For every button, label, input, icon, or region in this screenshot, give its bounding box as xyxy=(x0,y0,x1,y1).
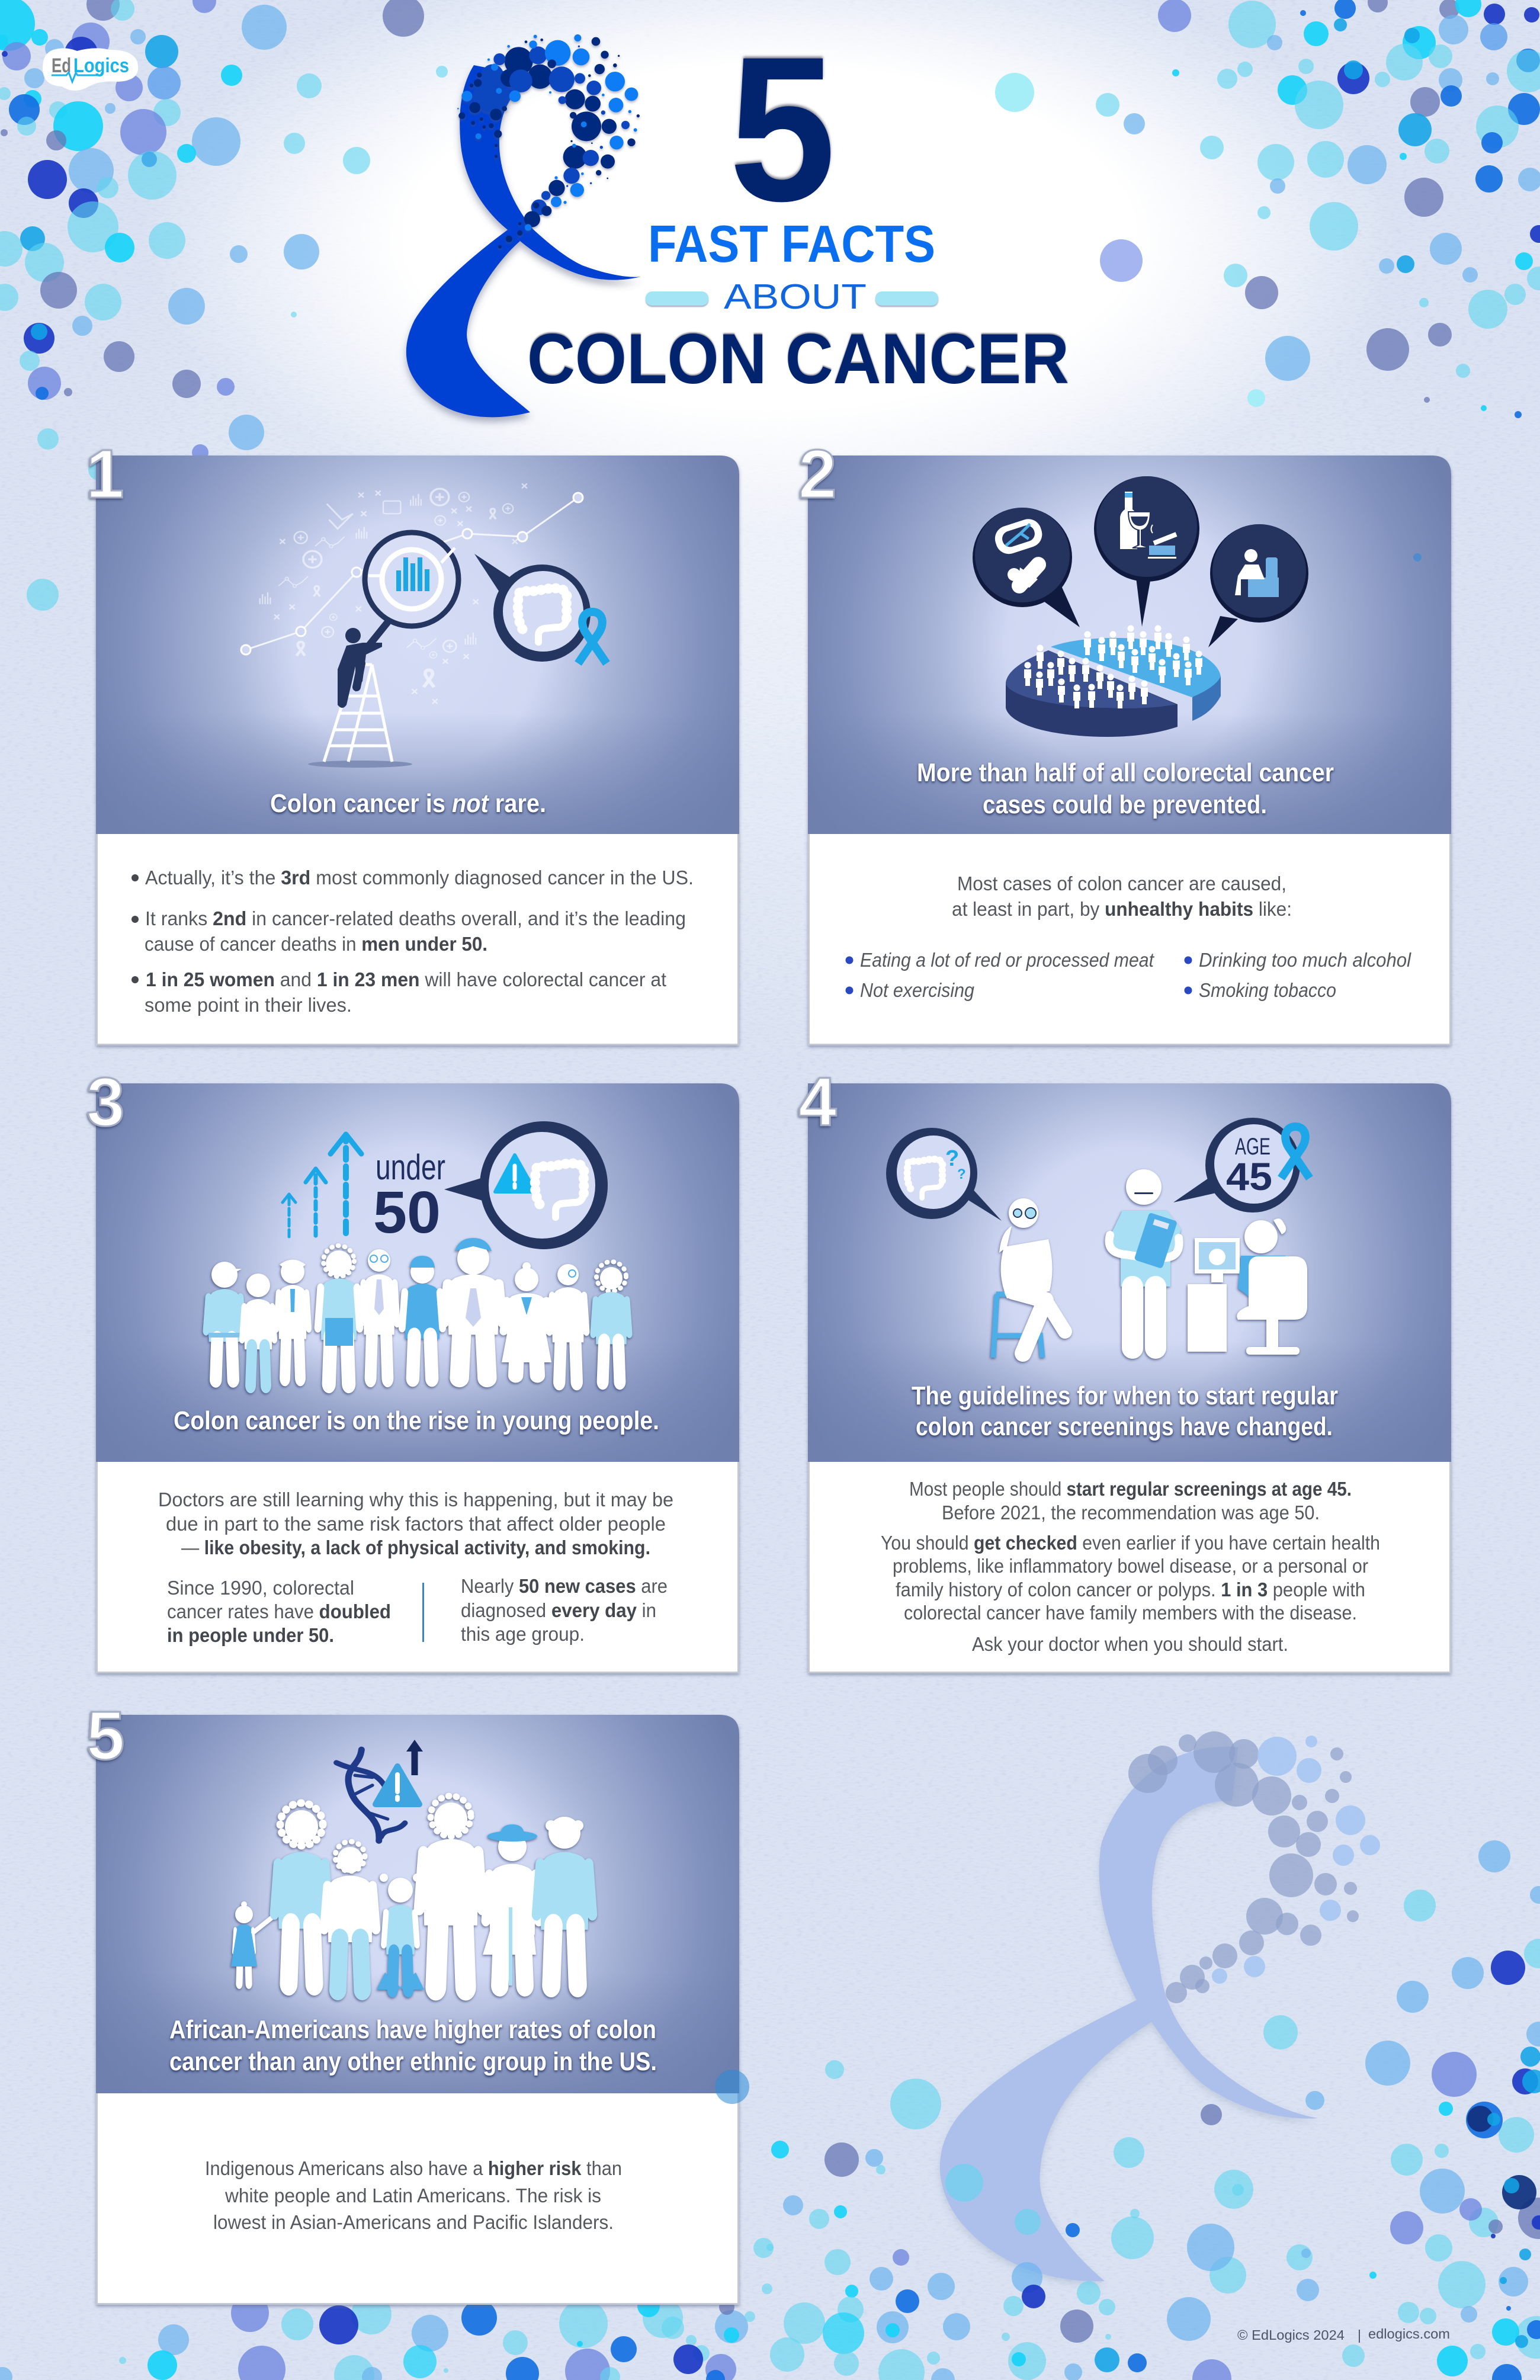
speech bubble: age 45 xyxy=(1173,1118,1310,1213)
panel 4 heading xyxy=(912,1381,1338,1441)
rising arrows xyxy=(283,1134,361,1237)
person on ladder xyxy=(338,628,382,708)
panel 4 heading: colon cancer screenings have changed. xyxy=(916,1412,1333,1441)
panel 1 bullets: Actually, it’s the 3rd most commonly diagnosed cancer in the US. xyxy=(145,867,694,889)
title: 5: 5 xyxy=(729,14,836,244)
panel 5 heading: African-Americans have higher rates of colon xyxy=(169,2015,656,2044)
title pill right xyxy=(875,291,938,306)
speech bubble: warning and colon xyxy=(444,1121,608,1249)
label: under 50: 50 xyxy=(373,1179,441,1246)
bubbles: bottom band xyxy=(0,2060,1319,2380)
overlapping dot on panel 2 xyxy=(1413,553,1422,562)
panel 1 background xyxy=(96,456,739,1045)
speech bubble: colon xyxy=(474,554,607,663)
title: COLON CANCER: COLON CANCER xyxy=(527,319,1069,399)
panel 4 heading: The guidelines for when to start regular xyxy=(912,1381,1338,1410)
panel 2 habits list: Smoking tobacco xyxy=(1199,979,1336,1001)
bubble: not exercising xyxy=(1208,524,1308,647)
panel 5 body xyxy=(205,2157,622,2233)
label: under 50: under xyxy=(376,1147,445,1187)
bubble: red meat xyxy=(973,508,1080,627)
icon: awareness ribbon xyxy=(578,612,607,663)
panel 3 heading: Colon cancer is on the rise in young people. xyxy=(174,1406,659,1435)
stat: doubled: in people under 50. xyxy=(167,1624,334,1646)
panel 4 background xyxy=(808,1083,1451,1673)
panel 3 body: — like obesity, a lack of physical activity, and smoking. xyxy=(181,1537,650,1558)
panel 1 bullets: cause of cancer deaths in men under 50. xyxy=(145,933,487,955)
panel 2 body: at least in part, by unhealthy habits like: xyxy=(952,898,1292,920)
number 2: 2 xyxy=(798,435,837,512)
panel 1: not rare xyxy=(86,435,739,1045)
faded ribbon bubbles xyxy=(1128,1731,1380,2003)
panel 2 habits list xyxy=(846,949,1412,1001)
speech bubble: colon question: ? xyxy=(957,1166,966,1182)
icon: awareness ribbon xyxy=(1281,1127,1310,1178)
panel 4 body: Most people should start regular screenings at age 45. xyxy=(909,1478,1352,1500)
logo: EdLogics: Logics xyxy=(73,54,129,77)
panel 4 body: family history of colon cancer or polyps. 1 in 3 people with xyxy=(896,1579,1365,1600)
stat: new cases xyxy=(461,1575,668,1645)
panel 2: preventable xyxy=(798,435,1451,1045)
speech bubble: age 45: 45 xyxy=(1226,1154,1272,1198)
panel 2 habits list: Not exercising xyxy=(860,979,975,1001)
number 4: 4 xyxy=(798,1063,837,1140)
speech bubble: age 45: AGE xyxy=(1235,1134,1270,1160)
warning triangle and arrow xyxy=(376,1740,423,1804)
panel 2 habits list: Drinking too much alcohol xyxy=(1199,949,1412,971)
pie chart of people xyxy=(1006,626,1221,737)
panel 5 background xyxy=(96,1715,739,2305)
panel 4 body xyxy=(881,1478,1380,1655)
bubbles: top right xyxy=(436,0,1540,418)
panel 2 heading xyxy=(917,758,1334,819)
bubbles: top left xyxy=(0,0,424,611)
panel 2 body: Most cases of colon cancer are caused, xyxy=(957,873,1286,894)
number 5: 5 xyxy=(86,1697,125,1774)
panel 3 body: Doctors are still learning why this is happening, but it may be xyxy=(158,1489,673,1510)
bubble: alcohol and tobacco xyxy=(1094,476,1199,627)
speech bubble: colon question: ? xyxy=(945,1146,959,1171)
panel 1 bullets: 1 in 25 women and 1 in 23 men will have colorectal cancer at xyxy=(146,968,666,990)
bubbles: bottom right xyxy=(1201,1840,1540,2380)
footer credit xyxy=(1237,2326,1450,2343)
doctor xyxy=(1108,1169,1181,1348)
panel 5: ethnic disparities xyxy=(86,1697,739,2305)
panel 5 body: white people and Latin Americans. The risk is xyxy=(224,2185,601,2206)
stat: new cases: Nearly 50 new cases are xyxy=(461,1575,668,1597)
stat: doubled: Since 1990, colorectal xyxy=(167,1577,354,1599)
title ribbon bubbles xyxy=(457,34,640,249)
soft central glow xyxy=(59,0,1481,1066)
stat: doubled xyxy=(167,1577,391,1646)
panel 3: rising in young people xyxy=(86,1063,739,1673)
panel 4 body: You should get checked even earlier if you have certain health xyxy=(881,1532,1380,1554)
footer credit: edlogics.com xyxy=(1368,2326,1450,2341)
group of young people xyxy=(206,1238,629,1385)
faint medical icons xyxy=(260,484,527,703)
panel 2 heading: cases could be prevented. xyxy=(983,790,1267,819)
title: ABOUT: ABOUT xyxy=(724,277,867,316)
footer credit: © EdLogics 2024 xyxy=(1237,2327,1345,2343)
family group xyxy=(231,1796,592,1990)
panel 3 background xyxy=(96,1083,739,1673)
footer credit: | xyxy=(1358,2327,1361,2343)
panel 4 body: colorectal cancer have family members with the disease. xyxy=(904,1602,1357,1624)
speech bubble: colon question xyxy=(886,1128,1002,1221)
panel 5 body: lowest in Asian-Americans and Pacific Islanders. xyxy=(213,2211,614,2233)
panel 5 heading: cancer than any other ethnic group in the US. xyxy=(169,2047,657,2076)
line chart xyxy=(241,493,583,655)
panel 1 bullets xyxy=(131,867,694,1016)
DNA helix xyxy=(336,1750,405,1841)
panel 1 heading: Colon cancer is not rare. xyxy=(270,789,546,818)
faded background ribbon xyxy=(940,1747,1318,2281)
label: under 50 xyxy=(373,1147,445,1246)
panel 5 body: Indigenous Americans also have a higher risk than xyxy=(205,2157,622,2179)
panel 1 bullets: It ranks 2nd in cancer-related deaths overall, and it’s the leading xyxy=(145,907,686,929)
overlapping bubble on panel 5 xyxy=(715,2070,749,2104)
panel 5 heading xyxy=(169,2015,657,2076)
panel 4 body: problems, like inflammatory bowel disease, or a personal or xyxy=(893,1555,1368,1577)
number 1: 1 xyxy=(86,435,124,512)
panel 1 bullets: some point in their lives. xyxy=(145,994,352,1016)
panel 2 habits list: Eating a lot of red or processed meat xyxy=(860,949,1155,971)
logo: EdLogics: Ed xyxy=(52,54,71,77)
panel 3 body: due in part to the same risk factors that affect older people xyxy=(166,1513,666,1535)
ladder xyxy=(308,665,412,768)
title: FAST FACTS: FAST FACTS xyxy=(648,214,935,273)
magnifying glass xyxy=(365,533,458,647)
title pill left xyxy=(646,291,708,306)
panel 2 heading: More than half of all colorectal cancer xyxy=(917,758,1334,787)
header white glow xyxy=(142,0,1398,533)
stat: doubled: cancer rates have doubled xyxy=(167,1600,391,1622)
panel 4 body: Before 2021, the recommendation was age 50. xyxy=(942,1502,1320,1523)
seated patient xyxy=(993,1198,1065,1358)
logo: EdLogics xyxy=(43,48,138,91)
panel 4 body: Ask your doctor when you should start. xyxy=(972,1633,1288,1655)
panel 2 body xyxy=(952,873,1292,920)
panel 2 background xyxy=(808,456,1451,1045)
title ribbon xyxy=(406,65,641,417)
stat: new cases: this age group. xyxy=(461,1623,585,1645)
panel 3 body xyxy=(158,1489,673,1558)
patient at computer xyxy=(1188,1218,1307,1355)
panel 4: screening guidelines xyxy=(798,1063,1451,1673)
stat: new cases: diagnosed every day in xyxy=(461,1599,656,1621)
number 3: 3 xyxy=(86,1063,125,1140)
